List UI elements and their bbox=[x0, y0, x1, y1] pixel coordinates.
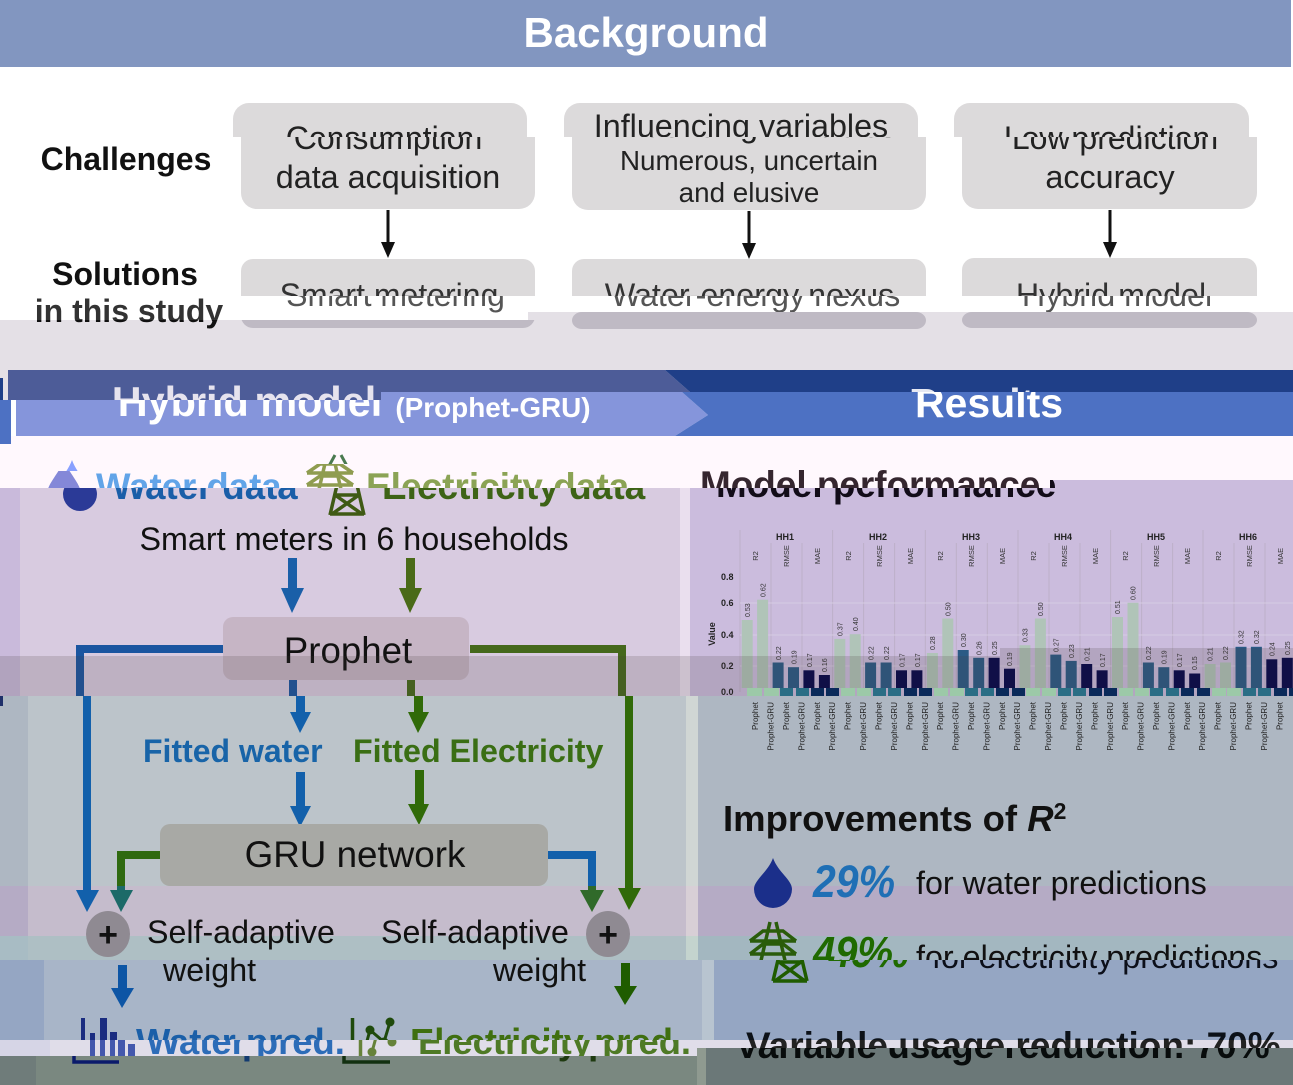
stat: 29% for water predictions: 29% bbox=[812, 856, 895, 907]
heading: Improvements of R2: Improvements of R bbox=[723, 798, 1054, 839]
solution box: water-energy nexus: Water-energy nexus bbox=[611, 277, 900, 313]
heading: Electricity pred.: Electricity pred. bbox=[404, 1021, 677, 1062]
x axis labels: Prophet bbox=[813, 701, 822, 730]
bar chart: model performance by household bbox=[707, 530, 1293, 697]
challenge box: low prediction accuracy: accuracy bbox=[1045, 159, 1175, 195]
stat: 49% for electricity predictions bbox=[812, 936, 1278, 974]
metric labels: RMSE bbox=[967, 545, 976, 567]
bar value labels: 0.19 bbox=[1007, 652, 1014, 666]
chart facet headers: HH3 bbox=[962, 532, 980, 542]
metric labels: MAE bbox=[906, 548, 915, 564]
metric labels: R2 bbox=[1029, 551, 1038, 561]
header: Results: Results bbox=[909, 380, 1057, 426]
x axis labels: Prophet bbox=[1060, 701, 1068, 730]
metric labels: RMSE bbox=[1060, 545, 1069, 567]
challenge box: consumption data acquisition bbox=[233, 103, 535, 209]
metric labels: RMSE bbox=[875, 545, 884, 567]
challenge box: low prediction accuracy: Low prediction bbox=[1012, 120, 1218, 156]
x axis labels: Prophet bbox=[906, 701, 914, 730]
bar value labels: 0.32 bbox=[1238, 630, 1246, 644]
bar value labels: 0.30 bbox=[961, 633, 968, 647]
connector: Prophet blue bypass bbox=[76, 649, 223, 912]
x axis labels: Prophet-GRU bbox=[890, 702, 899, 750]
bar value labels: 0.50 bbox=[946, 602, 952, 616]
heading: Model performance: Model performance bbox=[716, 464, 1056, 505]
stat: 49% for electricity predictions: 49% bbox=[812, 928, 893, 977]
metric labels: MAE bbox=[813, 548, 822, 564]
metric labels: MAE bbox=[998, 548, 1007, 564]
label: Challenges: Challenges bbox=[41, 141, 211, 177]
bar value labels: 0.21 bbox=[1208, 647, 1214, 661]
bar value labels: 0.17 bbox=[1177, 653, 1184, 667]
solution box: smart metering: Smart metering bbox=[280, 277, 498, 313]
bars bbox=[742, 600, 1293, 688]
connector: GRU left output bbox=[110, 855, 160, 912]
x axis labels: Prophet-GRU bbox=[798, 702, 806, 750]
chart facet headers: HH6 bbox=[1239, 532, 1257, 542]
bar value labels: 0.23 bbox=[1069, 644, 1076, 658]
bar value labels: 0.19 bbox=[1162, 650, 1168, 664]
heading: Water pred.: Water pred. bbox=[132, 1021, 331, 1062]
header: Results bbox=[665, 370, 1293, 436]
chart bar base strip bbox=[747, 688, 1293, 696]
label: right self-adaptive weight bbox=[381, 914, 586, 988]
solution box: water-energy nexus: Water-energy nexus bbox=[605, 277, 894, 313]
x axis labels: Prophet-GRU bbox=[766, 702, 776, 750]
arrow: electricity to Prophet bbox=[399, 558, 422, 613]
arrow: to water prediction bbox=[111, 965, 134, 1008]
challenge box: influencing variables: Influencing variables bbox=[594, 108, 888, 144]
challenge box: influencing variables: Influencing variables bbox=[602, 108, 896, 144]
heading: Water data: Water data bbox=[96, 466, 282, 507]
bar value labels: 0.28 bbox=[930, 636, 937, 650]
challenge box: influencing variables bbox=[564, 103, 926, 210]
header: Results: Results bbox=[915, 380, 1063, 426]
bar value labels: 0.40 bbox=[853, 617, 860, 631]
stat: 29% for water predictions: for water predictions bbox=[916, 865, 1207, 901]
challenge box: low prediction accuracy bbox=[954, 103, 1257, 209]
x axis labels: Prophet bbox=[1028, 701, 1038, 730]
box: GRU network: GRU network bbox=[245, 834, 466, 875]
bar value labels: 0.16 bbox=[822, 658, 829, 672]
challenge box: consumption data acquisition: data acquisition bbox=[276, 159, 500, 195]
stat: 49% for electricity predictions: 49% bbox=[828, 928, 909, 977]
arrow: fitted water to GRU bbox=[290, 772, 311, 827]
y axis: 0.2 bbox=[721, 661, 734, 671]
arrow: Prophet to fitted water bbox=[289, 680, 311, 733]
label: Fitted water: Fitted water bbox=[143, 733, 323, 769]
x axis labels: Prophet bbox=[874, 701, 884, 730]
header: Hybrid model (Prophet-GRU) bbox=[8, 370, 708, 436]
x axis labels: Prophet-GRU bbox=[1229, 702, 1238, 750]
metric labels: R2 bbox=[1214, 551, 1223, 561]
tint overlay: darker band across the middle bbox=[0, 648, 1293, 696]
heading: Electricity pred.: Electricity pred. bbox=[410, 1021, 683, 1062]
icon: electricity tower bbox=[307, 455, 364, 515]
bar value labels: 0.25 bbox=[1285, 641, 1292, 655]
metric labels: RMSE bbox=[782, 545, 791, 567]
icon: electricity tower large bbox=[750, 922, 807, 982]
x axis labels: Prophet-GRU bbox=[1136, 702, 1146, 750]
arrow: variables to nexus bbox=[742, 211, 756, 259]
heading: Water data: Water data bbox=[112, 466, 298, 507]
x axis labels: Prophet bbox=[1090, 701, 1100, 730]
stat: Variable usage reduction 70%: Variable usage reduction: 70% bbox=[735, 1025, 1270, 1066]
stat: 49% for electricity predictions: for electricity predictions bbox=[932, 939, 1278, 975]
arrow: fitted electricity to GRU bbox=[408, 770, 429, 825]
heading: Model performance: Model performance bbox=[700, 464, 1040, 505]
box: GRU network bbox=[160, 824, 548, 886]
label: left self-adaptive weight: Self-adaptive bbox=[147, 914, 335, 950]
x axis labels: Prophet bbox=[967, 701, 976, 730]
label: Fitted Electricity: Fitted Electricity bbox=[353, 733, 604, 769]
x axis labels: Prophet-GRU bbox=[1044, 702, 1053, 750]
icon: electricity prediction line chart bbox=[344, 1018, 398, 1062]
metric labels: R2 bbox=[844, 551, 853, 561]
solution box: hybrid model: Hybrid model bbox=[1022, 277, 1212, 313]
stat: 29% for water predictions bbox=[812, 856, 1207, 907]
icon: water drop bbox=[47, 460, 97, 511]
challenge box: consumption data acquisition: Consumption bbox=[286, 120, 474, 156]
label: right self-adaptive weight: weight bbox=[492, 952, 586, 988]
header: Background bbox=[0, 0, 1291, 67]
x axis labels: Prophet bbox=[998, 701, 1007, 730]
y axis: 0.8 bbox=[721, 572, 734, 582]
bar value labels: 0.24 bbox=[1270, 642, 1276, 656]
metric labels: MAE bbox=[1091, 548, 1100, 564]
connector: Prophet green bypass bbox=[470, 649, 641, 910]
heading: Improvements of R2: 2 bbox=[1054, 798, 1066, 824]
text: smart meters: Smart meters in 6 households bbox=[139, 521, 569, 557]
arrow: accuracy to hybrid model bbox=[1103, 210, 1117, 258]
x axis labels: Prophet bbox=[1121, 701, 1130, 730]
stat: Variable usage reduction 70%: Variable usage reduction: 70% bbox=[746, 1025, 1281, 1066]
icon: water drop large bbox=[754, 858, 792, 908]
node: left plus: + bbox=[98, 916, 118, 954]
solution box: hybrid model bbox=[962, 258, 1257, 328]
y axis: 0.0 bbox=[721, 687, 734, 697]
label: left self-adaptive weight: weight bbox=[162, 952, 256, 988]
bar value labels: 0.22 bbox=[776, 646, 783, 660]
x axis labels: Prophet bbox=[1183, 701, 1192, 730]
label: Solutions in this study bbox=[35, 256, 223, 329]
arrow: Prophet to fitted electricity bbox=[407, 680, 429, 733]
arrow: water to Prophet bbox=[281, 558, 304, 613]
heading: Electricity data: Electricity data bbox=[382, 466, 646, 507]
solution box: smart metering bbox=[241, 259, 535, 328]
challenge box: influencing variables: Numerous, uncertain bbox=[620, 145, 878, 176]
node: right plus bbox=[586, 911, 630, 957]
bar value labels: 0.26 bbox=[976, 641, 984, 655]
connector: GRU right output bbox=[548, 855, 604, 912]
bar value labels: 0.17 bbox=[807, 653, 814, 667]
arrow: to electricity prediction bbox=[614, 963, 637, 1005]
stat: 49% for electricity predictions: for electricity predictions bbox=[916, 939, 1262, 975]
metric labels: R2 bbox=[936, 551, 945, 561]
header: Hybrid model (Prophet-GRU): Hybrid model bbox=[118, 379, 382, 425]
x axis labels: Prophet bbox=[844, 701, 852, 730]
bar value labels: 0.27 bbox=[1054, 638, 1060, 652]
bar value labels: 0.15 bbox=[1192, 656, 1199, 670]
label: Solutions in this study: Solutions bbox=[52, 256, 198, 292]
x axis labels: Prophet-GRU bbox=[982, 702, 992, 750]
x axis labels: Prophet-GRU bbox=[828, 702, 837, 750]
x axis labels: Prophet bbox=[1214, 701, 1222, 730]
metric labels: MAE bbox=[1276, 548, 1285, 564]
node: left plus bbox=[86, 911, 130, 957]
bar value labels: 0.17 bbox=[900, 653, 906, 667]
bar value labels: 0.19 bbox=[792, 650, 798, 664]
x axis labels: Prophet bbox=[936, 701, 945, 730]
y axis: 0.4 bbox=[721, 630, 734, 640]
y axis bbox=[707, 572, 734, 697]
header: Background: Background bbox=[523, 9, 769, 56]
x axis labels: Prophet bbox=[782, 701, 791, 730]
bar value labels: 0.60 bbox=[1130, 586, 1138, 600]
bar value labels: 0.37 bbox=[838, 622, 844, 636]
metric labels: R2 bbox=[751, 551, 760, 561]
solution box: water-energy nexus bbox=[572, 259, 926, 329]
heading: Water pred.: Water pred. bbox=[146, 1021, 345, 1062]
solution box: smart metering: Smart metering bbox=[286, 277, 505, 313]
bar value labels: 0.50 bbox=[1038, 602, 1045, 616]
solution box: hybrid model: Hybrid model bbox=[1016, 277, 1206, 313]
bar value labels: 0.33 bbox=[1022, 628, 1030, 642]
icon: water prediction bar chart bbox=[74, 1018, 135, 1062]
arrow: consumption to smart metering bbox=[381, 210, 395, 258]
label: Solutions in this study: in this study bbox=[35, 293, 223, 329]
chart grid bbox=[740, 530, 1293, 692]
x axis labels: Prophet-GRU bbox=[952, 702, 960, 750]
label: Solutions in this study: in this study bbox=[35, 293, 223, 329]
chart facet headers: HH4 bbox=[1054, 532, 1072, 542]
bar value labels: 0.22 bbox=[1223, 646, 1230, 660]
x axis labels: Prophet-GRU bbox=[1168, 702, 1176, 750]
metric labels bbox=[751, 545, 1285, 567]
bar value labels: 0.17 bbox=[915, 653, 922, 667]
bar value labels: 0.22 bbox=[868, 646, 876, 660]
x axis labels: Prophet-GRU bbox=[1106, 702, 1115, 750]
label: left self-adaptive weight bbox=[147, 914, 335, 988]
panel: hybrid model flow bbox=[47, 455, 691, 1062]
stat: Variable usage reduction 70%: Variable usage reduction: 70% bbox=[746, 1025, 1281, 1066]
y axis: 0.6 bbox=[721, 598, 734, 608]
header: Hybrid model (Prophet-GRU): Hybrid model bbox=[112, 379, 376, 425]
bar value labels: 0.53 bbox=[745, 603, 752, 617]
x axis labels: Prophet-GRU bbox=[1013, 702, 1022, 750]
x axis labels: Prophet-GRU bbox=[859, 702, 868, 750]
bar value labels: 0.51 bbox=[1115, 600, 1122, 614]
bar value labels: 0.22 bbox=[884, 646, 891, 660]
box: Prophet bbox=[223, 617, 469, 680]
label: right self-adaptive weight: Self-adaptive bbox=[381, 914, 569, 950]
challenge box: consumption data acquisition: Consumption bbox=[294, 120, 482, 156]
x axis labels bbox=[751, 701, 1284, 750]
x axis labels: Prophet bbox=[1244, 701, 1254, 730]
challenge box: low prediction accuracy: Low prediction bbox=[1004, 120, 1210, 156]
bar value labels: 0.32 bbox=[1254, 630, 1261, 644]
x axis labels: Prophet bbox=[1152, 701, 1161, 730]
metric labels: RMSE bbox=[1245, 545, 1254, 567]
bar value labels: 0.17 bbox=[1100, 653, 1107, 667]
node: right plus: + bbox=[598, 916, 618, 954]
metric labels: R2 bbox=[1121, 551, 1130, 561]
bar value labels: 0.22 bbox=[1146, 646, 1153, 660]
y axis: Value bbox=[707, 622, 717, 646]
challenge box: influencing variables: and elusive bbox=[679, 177, 819, 208]
x axis labels: Prophet-GRU bbox=[921, 702, 930, 750]
x axis labels: Prophet-GRU bbox=[1260, 702, 1269, 750]
heading: Water data bbox=[96, 472, 298, 500]
bar value labels: 0.21 bbox=[1084, 647, 1092, 661]
metric labels: RMSE bbox=[1152, 545, 1161, 567]
heading: Electricity pred.: Electricity pred. bbox=[418, 1021, 691, 1062]
bar value labels: 0.62 bbox=[760, 583, 768, 597]
heading: Electricity data: Electricity data bbox=[366, 466, 630, 507]
bar value labels: 0.25 bbox=[992, 641, 999, 655]
bar value labels bbox=[745, 583, 1292, 672]
chart facet headers: HH1 bbox=[776, 532, 794, 542]
box: Prophet: Prophet bbox=[284, 630, 412, 671]
chart facet headers bbox=[776, 532, 1257, 542]
header: Hybrid model (Prophet-GRU): (Prophet-GRU) bbox=[395, 392, 591, 423]
x axis labels: Prophet-GRU bbox=[1075, 702, 1084, 750]
chart facet headers: HH2 bbox=[869, 532, 887, 542]
x axis labels: Prophet-GRU bbox=[1198, 702, 1207, 750]
x axis labels: Prophet bbox=[751, 701, 760, 730]
heading: Water pred.: Water pred. bbox=[136, 1021, 335, 1062]
x axis labels: Prophet bbox=[1276, 701, 1284, 730]
chart facet headers: HH5 bbox=[1147, 532, 1165, 542]
metric labels: MAE bbox=[1183, 548, 1192, 564]
